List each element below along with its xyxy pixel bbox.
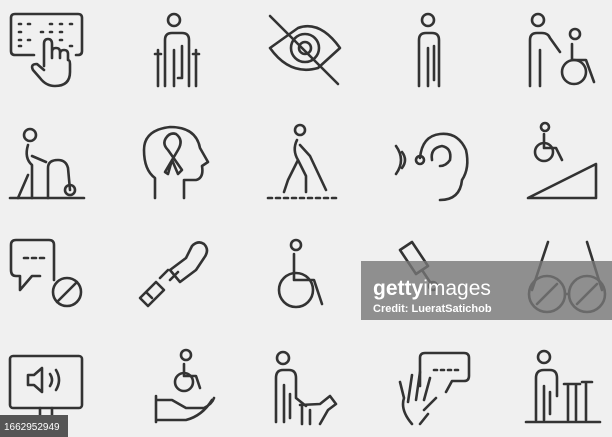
watermark band: [361, 261, 612, 320]
icon: person with vacuum: [10, 129, 84, 198]
icon: wheelchair person: [279, 240, 322, 307]
icon: person pushing wheelchair: [530, 14, 594, 86]
icon: prosthetic leg: [400, 242, 437, 290]
watermark band: gettyimages: [373, 277, 491, 300]
image id label: 1662952949: [4, 422, 60, 433]
icon: prosthetic arm: [140, 242, 207, 306]
icon: person with walker: [155, 14, 199, 86]
icon: person with guide dog: [276, 352, 336, 424]
icon: head with ribbon: [144, 127, 208, 198]
icon: monitor with speaker: [10, 356, 82, 422]
icon: ear with sound waves: [396, 134, 467, 200]
icon: standing person: [419, 14, 439, 86]
icon: hand with speech bubble: [400, 353, 469, 424]
icon: person with crutches: [526, 351, 600, 422]
icon: person with white cane: [268, 125, 340, 198]
icon: hand holding wheelchair: [156, 350, 214, 422]
icon: braille keyboard with hand: [11, 14, 82, 86]
icon: wheelchair on ramp: [528, 123, 596, 198]
icon: glasses: [529, 242, 605, 312]
watermark band: Credit: LueratSatichob: [373, 303, 492, 315]
image id label: [0, 415, 68, 437]
icon: blind eye: [270, 16, 340, 84]
icon: speech bubble with no sign: [11, 240, 81, 306]
